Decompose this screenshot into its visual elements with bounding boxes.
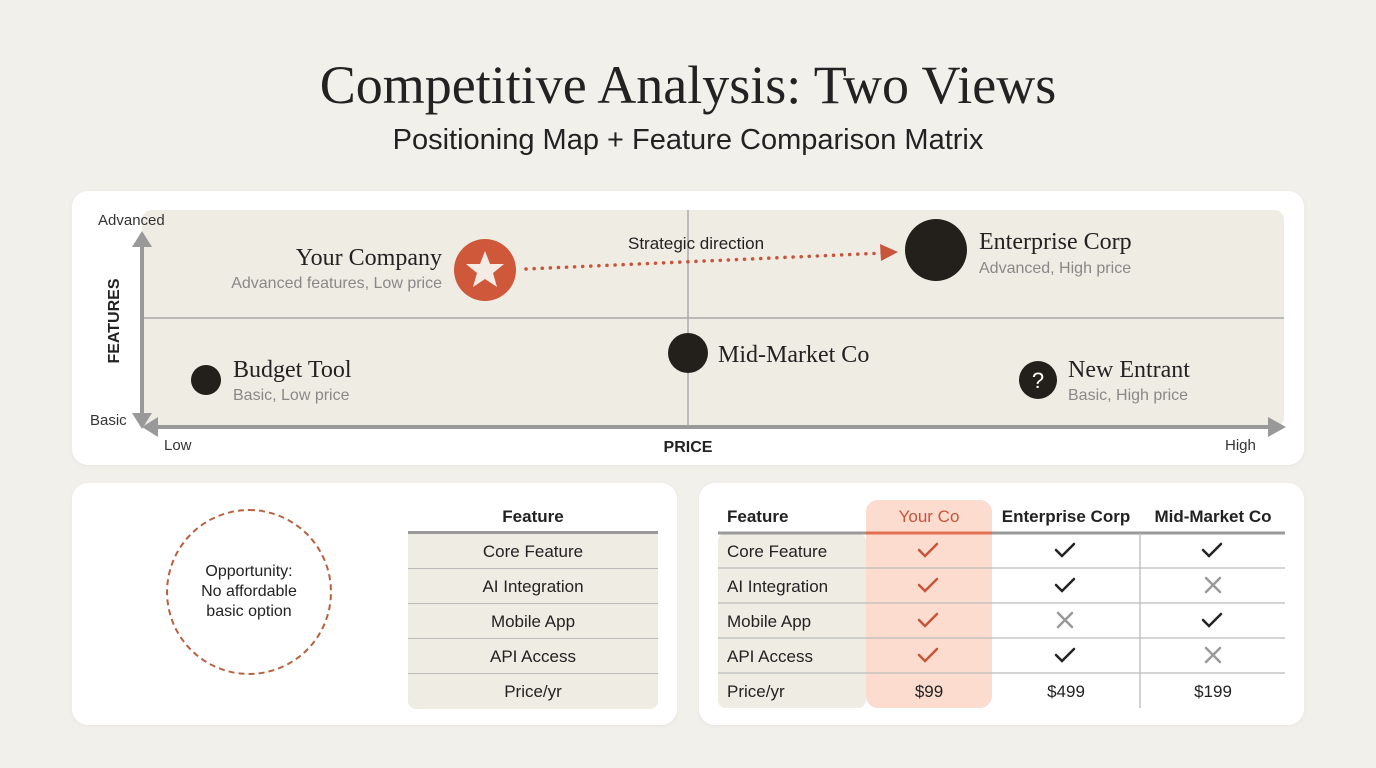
callout: opportunity circle <box>166 509 332 675</box>
point: budget tool <box>191 357 352 404</box>
checkmarks <box>919 544 1221 662</box>
callout: opportunity circle: No affordable <box>201 583 297 600</box>
axis: price <box>142 417 1286 456</box>
point: enterprise corp: Advanced, High price <box>979 260 1131 277</box>
axis: price: Low <box>164 437 192 454</box>
point: enterprise corp: Enterprise Corp <box>979 229 1132 255</box>
point: enterprise corp <box>905 219 1132 281</box>
table: feature list: Price/yr <box>504 682 562 701</box>
header row: Enterprise Corp <box>1002 507 1130 526</box>
axis: price: PRICE <box>664 439 713 456</box>
table: feature list: AI Integration <box>482 577 584 596</box>
prices: $499 <box>1047 682 1085 701</box>
axis: features: FEATURES <box>106 278 123 364</box>
point: new entrant: Basic, High price <box>1068 387 1188 404</box>
arrow: strategic direction <box>526 234 898 269</box>
callout: opportunity circle: Opportunity: <box>205 563 293 580</box>
point: your company <box>231 239 516 301</box>
point: new entrant <box>1019 357 1190 404</box>
point: your company: Advanced features, Low price <box>231 275 442 292</box>
point: mid-market co: Mid-Market Co <box>718 342 869 368</box>
prices: $199 <box>1194 682 1232 701</box>
table: feature list: Mobile App <box>491 612 575 631</box>
row labels: Mobile App <box>727 612 811 631</box>
header row <box>727 507 1272 526</box>
row labels: AI Integration <box>727 577 828 596</box>
axis: price: High <box>1225 437 1256 454</box>
point: budget tool: Basic, Low price <box>233 387 350 404</box>
subtitle: Positioning Map + Feature Comparison Matrix <box>393 124 983 156</box>
prices <box>915 682 1232 701</box>
table: feature list <box>408 507 658 709</box>
table: feature list: API Access <box>490 647 576 666</box>
row labels <box>727 542 828 701</box>
point: new entrant: New Entrant <box>1068 357 1190 383</box>
panel: positioning map <box>72 191 1304 465</box>
point: your company: Your Company <box>296 245 442 271</box>
row labels: Core Feature <box>727 542 827 561</box>
arrow: strategic direction: Strategic direction <box>628 234 764 253</box>
header row: Mid-Market Co <box>1154 507 1272 526</box>
callout: opportunity circle: basic option <box>206 603 292 620</box>
table: feature list: Feature <box>502 507 564 526</box>
point: mid-market co <box>668 333 869 373</box>
title: Competitive Analysis: Two Views <box>320 55 1056 115</box>
row labels: Price/yr <box>727 682 785 701</box>
table: feature list: Core Feature <box>483 542 583 561</box>
axis: features: Advanced <box>98 212 165 229</box>
prices: $99 <box>915 682 943 701</box>
axis: features: Basic <box>90 412 127 429</box>
panel: opportunity <box>72 483 677 725</box>
header row: Your Co <box>899 507 959 526</box>
row labels: API Access <box>727 647 813 666</box>
panel: comparison matrix <box>699 483 1304 725</box>
point: new entrant: ? <box>1032 368 1044 393</box>
point: budget tool: Budget Tool <box>233 357 352 383</box>
header row: Feature <box>727 507 788 526</box>
axis: features <box>90 212 165 429</box>
